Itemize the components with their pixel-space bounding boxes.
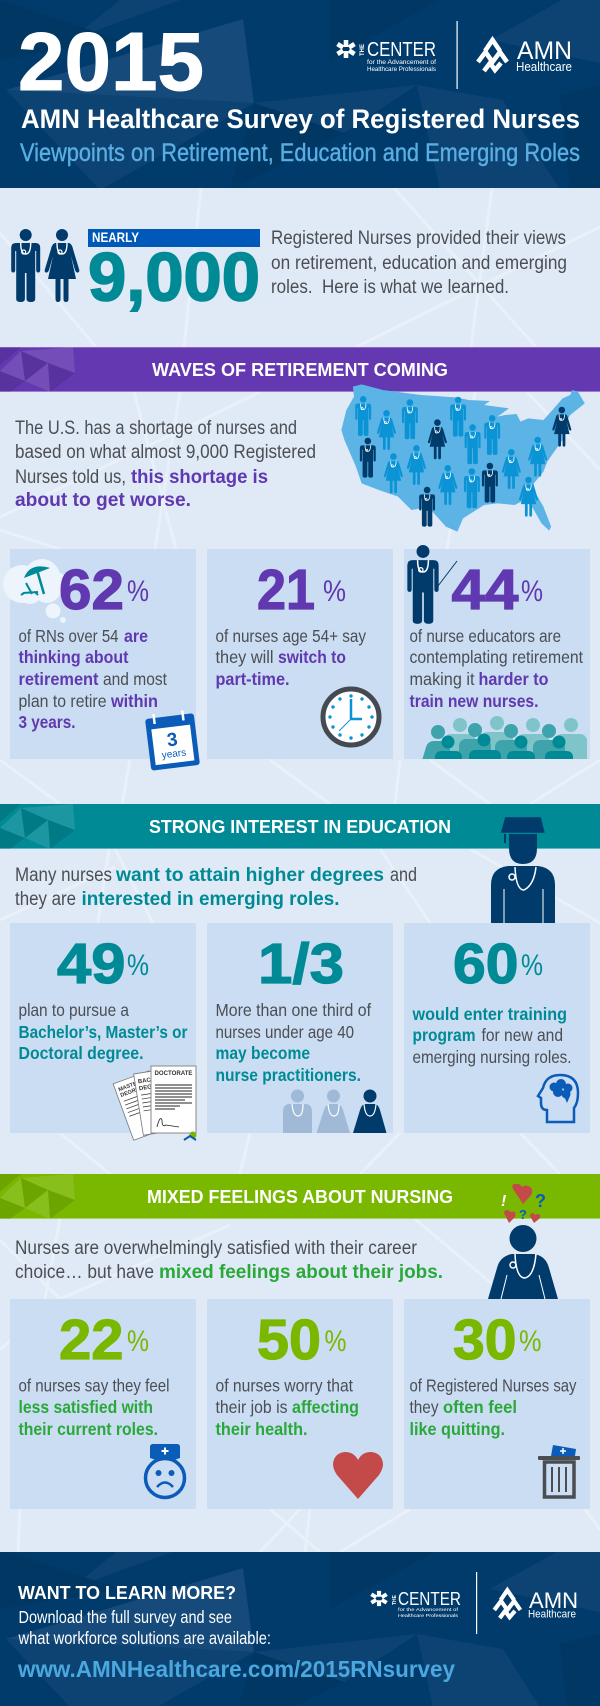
footer URL: www.AMNHealthcare.com/2015RNsurvey (17, 1656, 455, 1682)
stat text (216, 1376, 359, 1439)
stat text: Bachelor’s, Master’s or (18, 1022, 188, 1042)
icon: sad nurse (146, 1444, 184, 1498)
retirement intro text: this shortage is (131, 467, 268, 488)
icon: diplomas: BACHELOR (138, 1074, 173, 1085)
logo: The Center (338, 39, 436, 73)
stat text: program (412, 1025, 476, 1045)
stat text: 3 years. (18, 712, 76, 732)
stat 50%: % (324, 1325, 346, 1358)
stat 60%: 60 (453, 932, 518, 996)
stat text: affecting (292, 1397, 359, 1417)
stat text (216, 1000, 371, 1085)
card: 21% (207, 549, 393, 759)
stat text: of nurses worry that (216, 1376, 353, 1396)
icon: three nurses (283, 1090, 386, 1133)
footer logo: The Center: CENTER (398, 1589, 461, 1609)
stat text (410, 1376, 577, 1439)
stat text: nurses under age 40 (216, 1022, 354, 1042)
logo: The Center: CENTER (367, 39, 436, 61)
stat 30%: % (519, 1325, 542, 1358)
icon: head with brain (538, 1075, 578, 1122)
stat text (18, 1376, 170, 1439)
section band: education (0, 804, 600, 849)
icon: nurse with mixed feelings: ? (519, 1207, 527, 1222)
section heading: STRONG INTEREST IN EDUCATION (149, 817, 451, 837)
stat 62%: % (127, 575, 149, 608)
logo divider (456, 21, 458, 89)
stat 21%: % (323, 575, 346, 608)
stat text: their current roles. (18, 1419, 158, 1439)
map: US with nurses (341, 384, 585, 532)
stat text: emerging nursing roles. (412, 1047, 572, 1067)
logo: The Center: for the Advancement of (367, 60, 436, 66)
stat text: would enter training (412, 1004, 567, 1024)
icon: graduate nurse (491, 817, 555, 923)
education intro text (15, 865, 417, 910)
stat text: of nurses say they feel (18, 1376, 170, 1396)
mixed feelings intro text: mixed feelings about their jobs. (159, 1262, 443, 1283)
stat 62%: 62 (59, 558, 124, 622)
stat 50%: 50 (257, 1308, 321, 1372)
footer logo: The Center: Healthcare Professionals (398, 1613, 459, 1619)
stat text: like quitting. (410, 1419, 505, 1439)
stat text: plan to pursue a (18, 1000, 129, 1020)
retirement intro text: based on what almost 9,000 Registered (15, 442, 316, 463)
section band: mixed feelings (0, 1174, 600, 1219)
card: 44% (404, 545, 590, 766)
stat text: may become (216, 1043, 310, 1063)
stat text: retirement (18, 669, 99, 689)
logo: AMN Healthcare: Healthcare (516, 59, 572, 74)
icon: thought cloud with beach chair (3, 559, 67, 623)
header year: 2015 (18, 15, 204, 108)
stat 60%: % (521, 949, 543, 982)
stat text: contemplating retirement (410, 647, 583, 667)
logo: AMN Healthcare (478, 37, 572, 74)
intro paragraph (271, 228, 567, 298)
big number 9,000: 9,000 (88, 238, 260, 316)
retirement intro text: The U.S. has a shortage of nurses and (15, 418, 297, 439)
intro paragraph: on retirement, education and emerging (271, 253, 567, 274)
stat text: of nurse educators are (410, 626, 561, 646)
section heading: MIXED FEELINGS ABOUT NURSING (147, 1187, 453, 1207)
mixed feelings intro text: Nurses are overwhelmingly satisfied with their career (15, 1238, 418, 1259)
stat text: Doctoral degree. (18, 1043, 144, 1063)
stat text (18, 1000, 188, 1063)
footer text: what workforce solutions are available: (18, 1628, 271, 1648)
icon: audience (422, 716, 587, 759)
retirement intro text: about to get worse. (15, 490, 191, 511)
stat 49%: 49 (57, 932, 126, 996)
card: 22% (10, 1299, 196, 1509)
footer logo divider (476, 1572, 477, 1634)
icon: calendar 3 years: years (161, 747, 187, 761)
education intro text: Many nurses (15, 865, 112, 886)
stat text: part-time. (216, 669, 290, 689)
icon: calendar 3 years (145, 709, 200, 771)
stat text: harder to (478, 669, 548, 689)
stat text: for new and (482, 1025, 563, 1045)
stat 44%: % (521, 575, 543, 608)
education intro text: they are (15, 889, 76, 910)
stat 30%: 30 (453, 1308, 516, 1372)
stat text: often feel (443, 1397, 517, 1417)
icon: heart (333, 1452, 383, 1499)
icon: trash can with nurse cap (538, 1445, 580, 1497)
footer logo: The Center (371, 1589, 461, 1619)
logo: The Center: THE (360, 44, 366, 56)
footer logo: The Center: THE (392, 1594, 398, 1605)
stat text: of RNs over 54 (18, 626, 119, 646)
stat text: switch to (278, 647, 346, 667)
card: 49% (10, 923, 196, 1140)
stat text (412, 1004, 572, 1067)
education intro text: and (390, 865, 417, 886)
icon: nurse with mixed feelings: ! (501, 1193, 507, 1210)
header title: AMN Healthcare Survey of Registered Nurses (21, 104, 580, 134)
stat text: train new nurses. (410, 691, 538, 711)
footer heading: WANT TO LEARN MORE? (18, 1583, 236, 1603)
icon: nurse educator with pointer (407, 545, 457, 624)
card: 1/3 (207, 923, 393, 1133)
stat text: less satisfied with (18, 1397, 153, 1417)
header banner (0, 0, 600, 190)
stat text: their job is (216, 1397, 288, 1417)
stat text: they (410, 1397, 439, 1417)
icon: calendar 3 years: 3 (166, 729, 179, 752)
icon: diplomas (113, 1066, 196, 1140)
mixed feelings intro text (15, 1238, 443, 1283)
intro: 9,000 nurses (11, 228, 567, 316)
icon: nurse with mixed feelings (488, 1184, 558, 1299)
footer logo: AMN Healthcare: Healthcare (528, 1609, 576, 1621)
stat text: their health. (216, 1419, 308, 1439)
icon: clock (323, 689, 379, 745)
stat 44% (452, 558, 543, 622)
stat 49% (57, 932, 149, 996)
logo: AMN Healthcare: AMN (517, 37, 572, 65)
stat 44%: 44 (452, 558, 519, 622)
stat 22%: 22 (59, 1308, 124, 1372)
stat text (18, 626, 167, 732)
stat text: More than one third of (216, 1000, 371, 1020)
footer logo: AMN Healthcare (494, 1588, 578, 1621)
NEARLY label: NEARLY (92, 229, 140, 245)
section heading: WAVES OF RETIREMENT COMING (152, 360, 448, 380)
icon: nurse with mixed feelings: ? (535, 1191, 546, 1211)
card: 60% (404, 923, 590, 1133)
stat 22%: % (127, 1325, 149, 1358)
icon: diplomas: MASTER (118, 1080, 142, 1093)
stat 1/3: 1/3 (258, 932, 344, 996)
stat text (216, 626, 366, 689)
card: 62% (3, 549, 200, 771)
icon: diplomas: DEGREE (120, 1085, 144, 1099)
footer logo: The Center: for the Advancement of (398, 1607, 459, 1613)
stat text: are (124, 626, 148, 646)
icon: diplomas: DOCTORATE (154, 1070, 193, 1077)
stat text: and most (103, 669, 167, 689)
NEARLY label (88, 229, 260, 247)
education intro text: want to attain higher degrees (115, 865, 384, 886)
icon: diplomas: DEGREE (139, 1082, 165, 1092)
card: 30% (404, 1299, 590, 1509)
logo: The Center: Healthcare Professionals (367, 67, 436, 73)
stat text: thinking about (18, 647, 129, 667)
stat text: plan to retire (18, 691, 106, 711)
stat text: within (110, 691, 158, 711)
footer banner (0, 1549, 600, 1706)
mixed feelings intro text: choice… but have (15, 1262, 154, 1283)
stat 49%: % (127, 949, 149, 982)
icon: male and female nurses (11, 229, 79, 302)
intro paragraph: roles. Here is what we learned. (271, 277, 509, 298)
stat 21%: 21 (257, 558, 315, 622)
intro paragraph: Registered Nurses provided their views (271, 228, 566, 249)
education intro text: interested in emerging roles. (82, 889, 340, 910)
stat text: of nurses age 54+ say (216, 626, 366, 646)
retirement intro text (15, 418, 316, 511)
stat text: nurse practitioners. (216, 1065, 361, 1085)
stat text: making it (410, 669, 475, 689)
footer text: Download the full survey and see (18, 1607, 232, 1627)
stat text (410, 626, 583, 711)
retirement intro text: Nurses told us, (15, 467, 126, 488)
footer text (18, 1607, 271, 1648)
card: 50% (207, 1299, 393, 1509)
footer logo: AMN Healthcare: AMN (529, 1588, 578, 1613)
stat text: they will (216, 647, 274, 667)
section band: retirement (0, 347, 600, 392)
